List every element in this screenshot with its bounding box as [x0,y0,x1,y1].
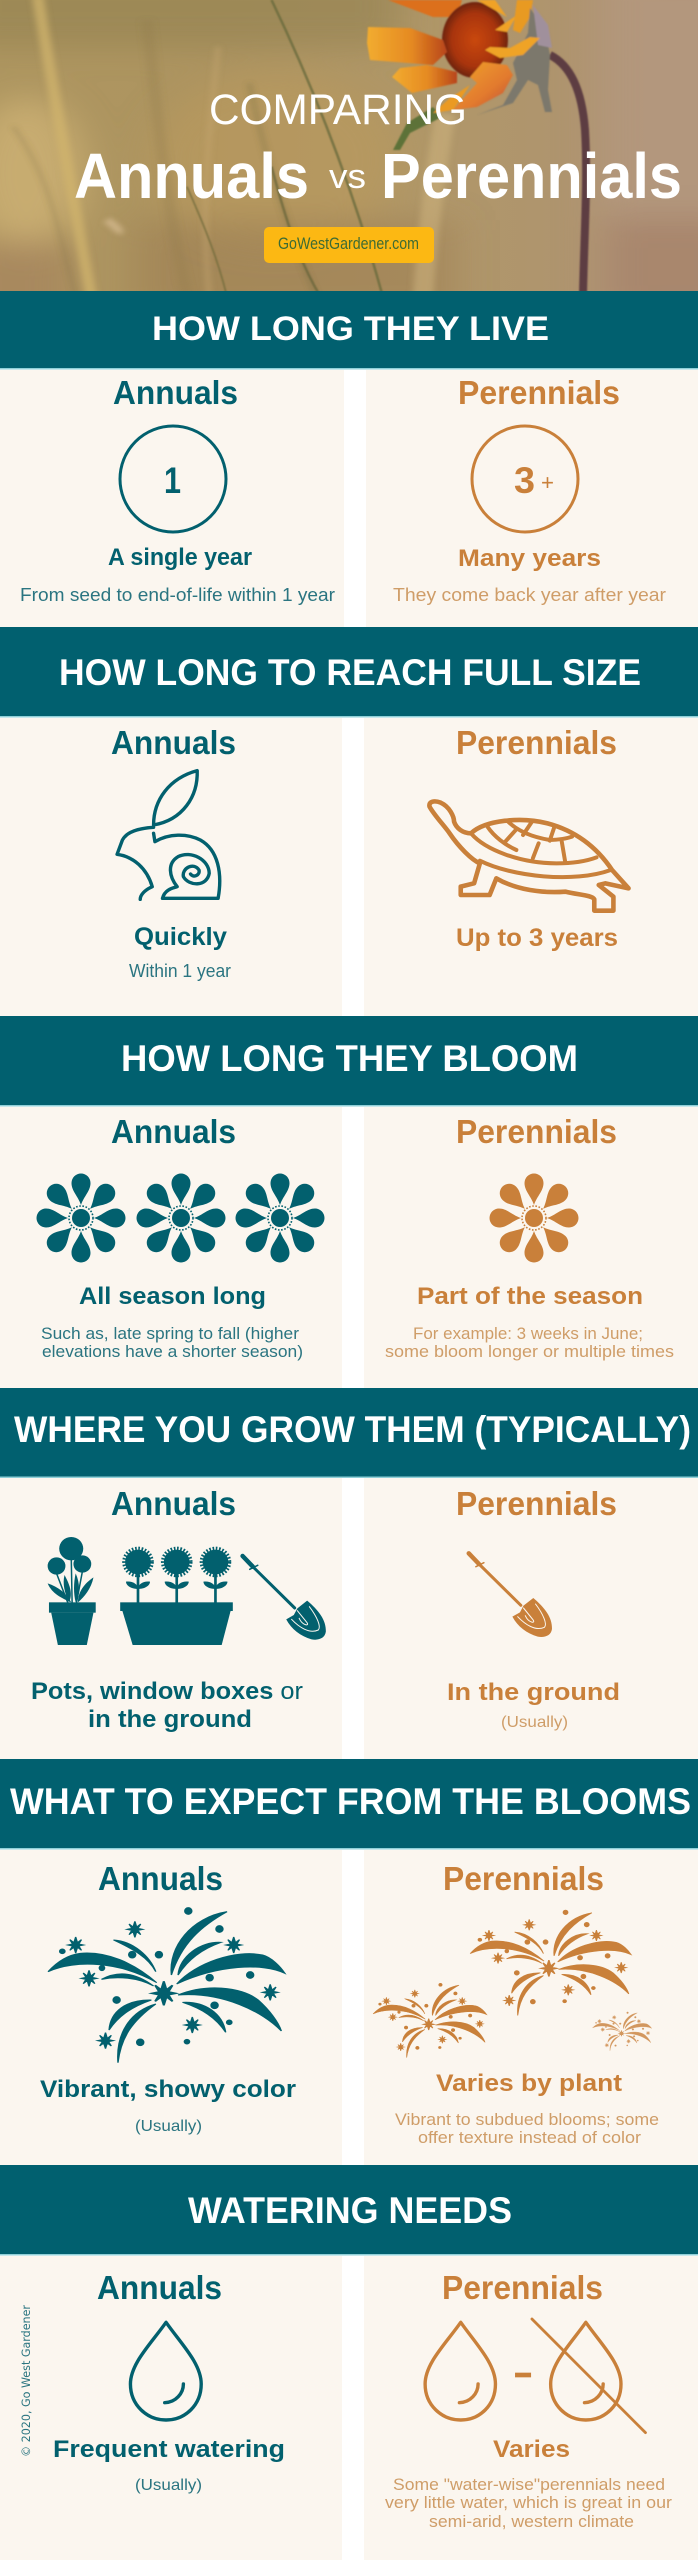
description [395,2110,659,2147]
label: pots, window boxes or in the ground: Pots, window boxes or [31,1678,303,1705]
label: up to 3 years: Up to 3 years [456,924,618,952]
band heading [0,1016,698,1106]
icon: single flower [490,1174,578,1262]
description: very little water, which is great in our [385,2493,672,2512]
icon: circled number 3 plus: 3 [514,460,535,501]
description: From seed to end-of-life within 1 year [20,585,335,605]
band heading: HOW LONG THEY BLOOM [121,1038,578,1079]
hero title: annuals vs perennials: vs [329,158,366,196]
band heading [0,1388,698,1478]
panel: annuals bloom [0,1107,342,1388]
hero title: annuals vs perennials: Annuals [74,140,309,212]
band heading [0,291,698,370]
icon: circled number 1 [120,426,226,532]
description: Some "water-wise"perennials need [393,2475,665,2494]
column heading: Annuals [98,1860,223,1897]
label: varies: Varies [493,2436,570,2463]
hero photo: grasses and wildflower [0,0,698,333]
panel: annuals watering [0,2256,342,2560]
icon: circled number 3 plus [472,426,578,532]
icon: three flowers [36,1174,324,1262]
column heading: Perennials [456,1113,617,1150]
panel: annuals location [0,1478,342,1759]
label: varies by plant: Varies by plant [436,2070,622,2097]
website button: GoWestGardener.com [278,235,419,253]
description: (Usually) [501,1714,568,1731]
section: what to expect from the blooms [0,1759,698,2165]
description: They come back year after year [393,585,666,605]
icon: large firework [48,1908,285,2063]
icon: turtle [429,801,629,911]
hero title: annuals vs perennials: Perennials [381,140,682,212]
icon: shovel [469,1553,552,1637]
hero banner [0,0,698,333]
description: (Usually) [135,2118,202,2135]
panel: annuals growth [0,718,342,1016]
label: pots, window boxes or in the ground [31,1678,303,1733]
band heading [0,627,698,718]
panel: perennials blooms [364,1850,698,2165]
band heading: HOW LONG THEY LIVE [152,310,549,348]
label: quickly: Quickly [134,923,227,951]
description: semi-arid, western climate [429,2512,634,2531]
label: many years: Many years [458,545,601,572]
section: how long they bloom [0,1016,698,1388]
icon: rabbit [117,771,220,899]
band heading: WHAT TO EXPECT FROM THE BLOOMS [10,1781,691,1822]
column heading: Perennials [456,724,617,761]
band heading [0,1759,698,1850]
tulip pot [48,1537,96,1645]
section: where you grow them [0,1388,698,1759]
panel: perennials watering [364,2256,698,2560]
description [41,1324,303,1361]
description: Vibrant to subdued blooms; some [395,2110,659,2129]
icon: water drop [130,2322,201,2420]
column heading: Perennials [456,1485,617,1522]
icon: circled number 1: 1 [164,460,181,501]
icon: three fireworks of varying size [373,1910,652,2058]
panel: annuals lifespan [0,370,344,627]
column heading: Perennials [442,2269,603,2306]
label: in the ground: In the ground [447,1679,620,1706]
description: Within 1 year [129,961,231,981]
panel: perennials bloom [364,1107,698,1388]
shovel [243,1556,326,1640]
copyright notice: © 2020, Go West Gardener [19,2305,33,2457]
label: frequent watering: Frequent watering [53,2436,285,2463]
description: (Usually) [135,2477,202,2494]
column heading: Perennials [458,374,620,411]
section: watering needs [0,2165,698,2560]
label: a single year: A single year [108,544,252,571]
hero title: annuals vs perennials [74,140,682,212]
icon: pots and shovel [48,1537,326,1645]
column heading: Annuals [113,374,238,411]
description: For example: 3 weeks in June; [413,1324,643,1343]
label: part of the season: Part of the season [417,1283,643,1310]
column heading: Annuals [111,724,236,761]
section: how long they live [0,291,698,627]
description: elevations have a shorter season) [42,1342,303,1361]
column heading: Annuals [111,1113,236,1150]
description: offer texture instead of color [418,2128,641,2147]
description [385,2475,672,2531]
section: how long to reach full size [0,627,698,1016]
hero title: comparing: COMPARING [209,86,467,134]
icon: water drop minus crossed-out drop [425,2319,645,2433]
column heading: Annuals [111,1485,236,1522]
icon: circled number 3 plus: + [541,470,554,495]
band heading [0,2165,698,2256]
website button [264,227,434,263]
label: pots, window boxes or in the ground: in the ground [88,1706,252,1733]
label: all season long: All season long [79,1283,266,1310]
panel: perennials growth [364,718,698,1016]
column heading: Perennials [443,1860,604,1897]
window box with sunflowers [120,1549,233,1645]
panel: perennials lifespan [366,370,698,627]
band heading: WATERING NEEDS [188,2190,512,2231]
description [385,1324,674,1361]
panel: annuals blooms [0,1850,342,2165]
description: some bloom longer or multiple times [385,1342,674,1361]
column heading: Annuals [97,2269,222,2306]
description: Such as, late spring to fall (higher [41,1324,299,1343]
band heading: HOW LONG TO REACH FULL SIZE [59,652,641,693]
label: vibrant, showy color: Vibrant, showy color [40,2076,296,2103]
panel: perennials location [364,1478,698,1759]
